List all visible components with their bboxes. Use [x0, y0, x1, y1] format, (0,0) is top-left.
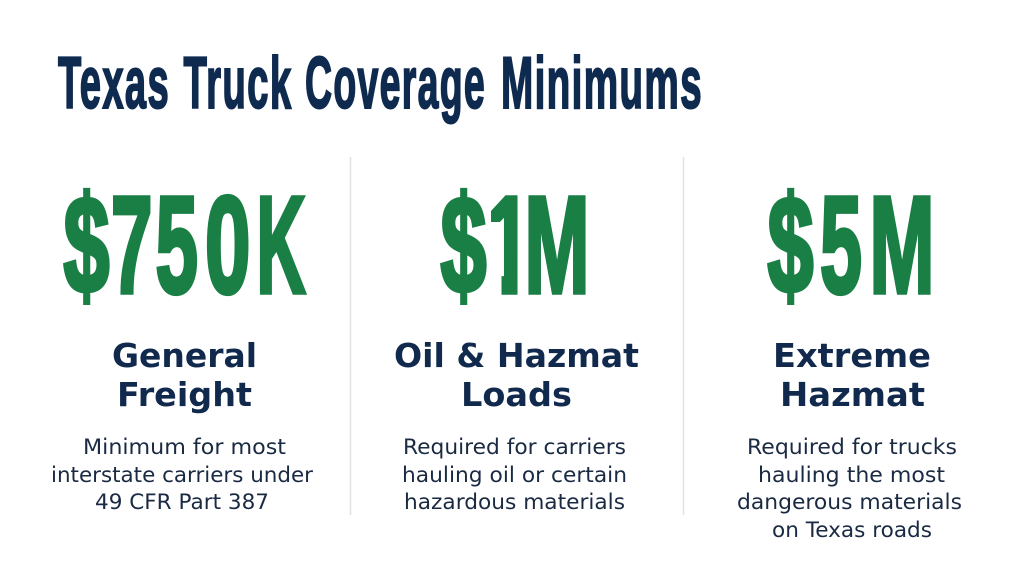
description: general freight: 49 CFR Part 387 — [95, 490, 269, 515]
heading: General Freight — [112, 336, 257, 414]
description: extreme hazmat: dangerous materials — [737, 490, 962, 515]
panel: extreme hazmat — [737, 168, 962, 543]
description: oil and hazmat loads: hauling oil or certain — [402, 463, 627, 488]
amount: $750K — [64, 168, 306, 322]
amount: $5M: 5 — [820, 168, 862, 322]
panel: general freight — [51, 168, 313, 515]
amount: $1M: M — [524, 168, 590, 322]
amount: $5M: M — [870, 168, 934, 322]
heading: Oil & Hazmat Loads: Loads — [461, 375, 572, 414]
amount: $750K: $ — [64, 168, 110, 322]
amount: $750K: 5 — [156, 168, 198, 322]
amount: $1M: $ — [440, 168, 486, 322]
panel: general freight: K — [256, 168, 306, 322]
heading: Extreme Hazmat — [773, 336, 931, 414]
heading: General Freight: Freight — [117, 375, 252, 414]
heading: General Freight: General — [112, 336, 257, 375]
description: extreme hazmat: hauling the most — [758, 463, 945, 488]
amount: $750K: 7 — [111, 168, 152, 322]
amount: $1M — [440, 188, 586, 305]
title — [58, 43, 703, 124]
description: extreme hazmat: on Texas roads — [772, 518, 932, 543]
heading: Oil & Hazmat Loads — [394, 336, 639, 414]
heading: Extreme Hazmat: Hazmat — [780, 375, 925, 414]
description: extreme hazmat: Required for trucks — [747, 435, 957, 460]
description: general freight: interstate carriers under — [51, 463, 313, 488]
description: general freight — [51, 435, 313, 515]
amount: $1M: 1 — [486, 168, 532, 322]
description: oil and hazmat loads — [402, 435, 627, 515]
description: general freight: Minimum for most — [83, 435, 286, 460]
title: Minimums — [501, 43, 703, 124]
amount: $5M — [768, 168, 934, 322]
heading: Oil & Hazmat Loads: Oil & Hazmat — [394, 336, 639, 375]
description: extreme hazmat — [737, 435, 962, 543]
description: oil and hazmat loads: Required for carriers — [403, 435, 626, 460]
amount: $5M: $ — [768, 168, 814, 322]
title: Coverage — [305, 43, 486, 124]
heading: Extreme Hazmat: Extreme — [773, 336, 931, 375]
title: Truck — [184, 43, 292, 124]
description: oil and hazmat loads: hazardous materials — [404, 490, 625, 515]
title: Texas — [58, 43, 170, 124]
panel: oil and hazmat loads — [394, 168, 639, 515]
amount: $750K: 0 — [205, 168, 250, 322]
